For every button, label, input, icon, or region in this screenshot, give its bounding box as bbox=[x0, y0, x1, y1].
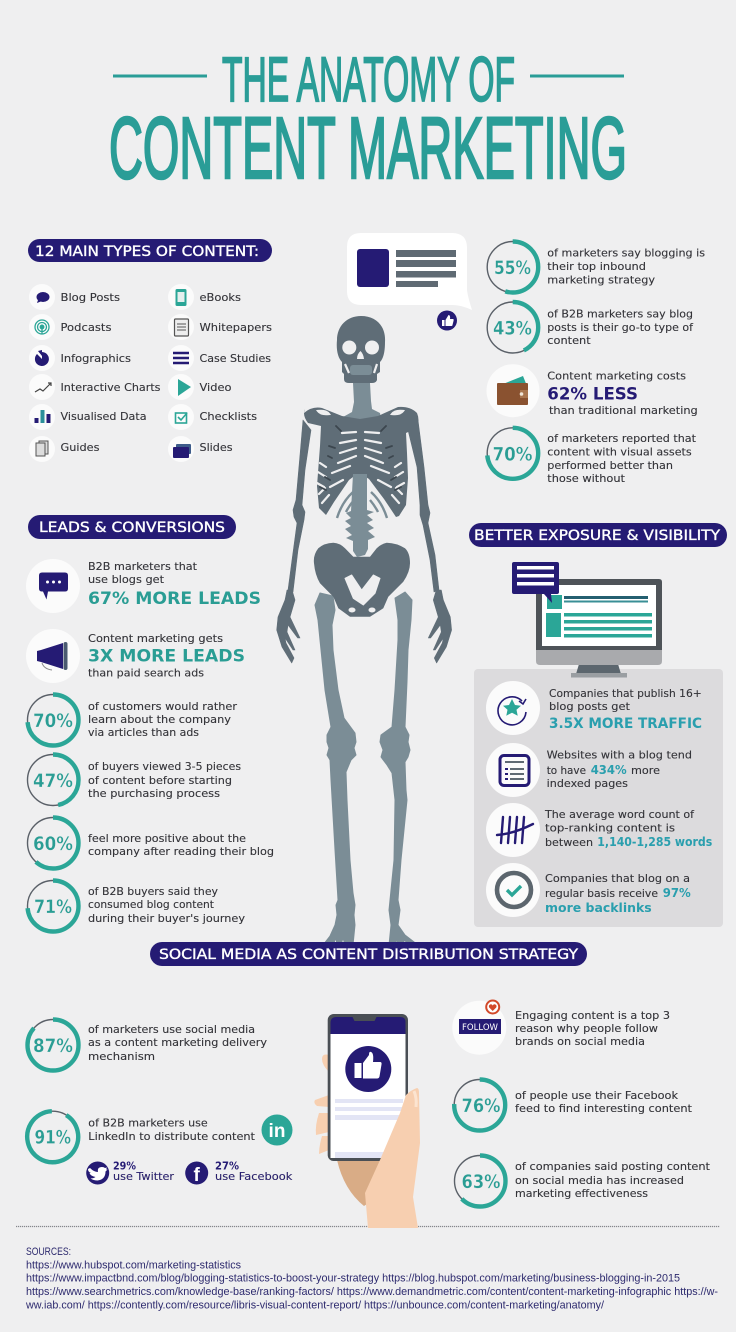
list labels: Infographics bbox=[60, 352, 131, 365]
list labels: Case Studies bbox=[200, 352, 271, 365]
list labels: Video bbox=[200, 381, 232, 394]
item: 3.5x more traffic: 3.5X MORE TRAFFIC bbox=[549, 716, 702, 732]
pelvis bbox=[314, 543, 410, 617]
icon: whitepapers bbox=[174, 319, 188, 336]
gray panel background bbox=[474, 669, 723, 927]
heading: leads and conversions bbox=[28, 515, 236, 539]
stat: 43% bbox=[487, 302, 694, 353]
item: word count: The average word count of bbox=[544, 808, 695, 821]
twitter stat: use Twitter bbox=[113, 1170, 174, 1183]
item: 434% more indexed pages: more bbox=[631, 764, 660, 777]
icon circles bbox=[29, 284, 194, 462]
item: word count: 1,140-1,285 words bbox=[597, 835, 712, 849]
stat: 71% buyers journey: consumed blog content bbox=[88, 898, 215, 911]
stat: 70% customers bbox=[28, 694, 237, 746]
stat: 91% linkedin: 91% bbox=[34, 1127, 71, 1149]
twitter stat: 29% bbox=[113, 1160, 136, 1172]
item: 434% more indexed pages: Websites with a blog tend bbox=[547, 748, 692, 762]
stat: 87% social media: mechanism bbox=[88, 1050, 155, 1063]
spine bbox=[345, 474, 375, 557]
stat: 87% social media: 87% bbox=[33, 1035, 73, 1057]
stat: 71% buyers journey: during their buyer's journey bbox=[88, 912, 246, 925]
ribs bbox=[317, 411, 404, 503]
stat: 76% facebook: of people use their Facebook bbox=[515, 1089, 679, 1102]
item: 3.5x more traffic: blog posts get bbox=[549, 700, 631, 713]
stat: 43%: 43% bbox=[493, 318, 532, 340]
stat: 55%: their top inbound bbox=[547, 260, 646, 273]
stat: 71% buyers journey bbox=[28, 880, 246, 932]
stat: 60% positive bbox=[28, 818, 274, 868]
icon: ebooks bbox=[176, 289, 186, 306]
stat: 62% less with wallet icon: 62% LESS bbox=[547, 384, 638, 404]
icon: visualised data bbox=[34, 410, 50, 423]
list labels: Podcasts bbox=[60, 321, 112, 334]
item: 3x more leads: than paid search ads bbox=[88, 666, 204, 680]
icon: video bbox=[178, 379, 191, 396]
item: 67% more leads bbox=[26, 559, 261, 613]
item: 3x more leads bbox=[26, 629, 245, 683]
stat: 91% linkedin: of B2B marketers use bbox=[88, 1116, 208, 1130]
ribcage bbox=[304, 407, 418, 517]
stat: 91% linkedin bbox=[18, 1102, 256, 1172]
item: follow: brands on social media bbox=[515, 1035, 645, 1048]
item: 3x more leads: 3X MORE LEADS bbox=[88, 646, 245, 666]
panel: leads and conversions bbox=[26, 515, 274, 932]
stat: 70% customers: 70% bbox=[33, 710, 73, 732]
speech bubble bbox=[347, 233, 472, 310]
list labels: eBooks bbox=[200, 291, 241, 304]
list labels: Whitepapers bbox=[200, 321, 272, 334]
stat: 70% customers: of customers would rather bbox=[88, 700, 237, 713]
item: 434% more indexed pages bbox=[486, 743, 692, 797]
list labels: Interactive Charts bbox=[60, 381, 161, 394]
sources: https://www.searchmetrics.com/knowledge-base/ranking-factors/ https://www.demandmetric.com/content/content-marketing-infographic https://w- bbox=[26, 1286, 718, 1298]
stat: 71% buyers journey: of B2B buyers said they bbox=[88, 885, 218, 898]
stat: 43%: content bbox=[547, 334, 591, 347]
item: 434% more indexed pages: indexed pages bbox=[547, 777, 628, 790]
stat: 76% facebook bbox=[454, 1080, 693, 1130]
stat: 87% social media bbox=[28, 1020, 267, 1070]
list labels: Blog Posts bbox=[60, 291, 120, 304]
icon: monitor bbox=[512, 562, 662, 678]
list labels: Checklists bbox=[200, 410, 257, 423]
stat: 63% companies: of companies said posting content bbox=[515, 1160, 711, 1173]
panel: social left bbox=[18, 1020, 293, 1186]
item: 97% more backlinks: more backlinks bbox=[545, 901, 652, 915]
icon: blog posts bbox=[36, 292, 50, 303]
stat: 70% visual assets: performed better than bbox=[547, 459, 673, 472]
stat: 71% buyers journey: 71% bbox=[34, 896, 72, 918]
item: word count: between bbox=[545, 836, 593, 849]
icon: podcasts bbox=[35, 320, 49, 334]
facebook stat bbox=[185, 1160, 293, 1186]
icon: slides bbox=[173, 444, 191, 458]
stat: 55%: 55% bbox=[494, 257, 531, 279]
icon: checklists bbox=[176, 413, 187, 423]
item: follow: FOLLOW bbox=[462, 1023, 498, 1033]
item: 3.5x more traffic: Companies that publish 16+ bbox=[549, 687, 702, 700]
neck and collar bbox=[343, 383, 381, 423]
heading: social media as content distribution strategy bbox=[150, 942, 587, 966]
item: 97% more backlinks: regular basis receive bbox=[545, 887, 658, 900]
stat: 60% positive: company after reading their blog bbox=[88, 845, 274, 858]
skull bbox=[337, 316, 385, 383]
heading: 12 main types: 12 MAIN TYPES OF CONTENT: bbox=[35, 244, 259, 260]
item: 434% more indexed pages: to have bbox=[547, 764, 586, 777]
sources: https://www.impactbnd.com/blog/blogging-statistics-to-boost-your-strategy https://blog.hubspot.com/marketing/business-blogging-in-2015 bbox=[26, 1272, 680, 1284]
panel: better exposure items bbox=[486, 681, 712, 917]
panel: blogging statistics bbox=[486, 242, 705, 485]
stat: 76% facebook: 76% bbox=[462, 1095, 500, 1117]
item: 67% more leads: B2B marketers that bbox=[88, 560, 198, 573]
list labels bbox=[60, 291, 272, 454]
stat: 87% social media: as a content marketing delivery bbox=[88, 1036, 267, 1049]
icon: case studies bbox=[173, 353, 189, 363]
item: word count: top-ranking content is bbox=[545, 822, 675, 834]
item: follow: reason why people follow bbox=[515, 1022, 658, 1035]
stat: 47% buyers bbox=[28, 754, 241, 806]
stat: 47% buyers: of content before starting bbox=[88, 774, 232, 787]
item: 67% more leads: use blogs get bbox=[88, 573, 165, 586]
stat: 62% less with wallet icon bbox=[486, 364, 698, 417]
sources bbox=[25, 1246, 718, 1312]
icon: guides bbox=[36, 441, 48, 456]
stat: 91% linkedin: LinkedIn to distribute content bbox=[88, 1130, 256, 1143]
stat: 76% facebook: feed to find interesting content bbox=[515, 1102, 693, 1115]
heading: leads and conversions: LEADS & CONVERSIONS bbox=[39, 520, 225, 536]
panel: 12 main types of content bbox=[28, 239, 272, 462]
stat: 60% positive: feel more positive about the bbox=[88, 832, 246, 845]
sources: SOURCES: bbox=[26, 1246, 71, 1258]
item: 434% more indexed pages: 434% bbox=[591, 763, 627, 777]
stat: 70% visual assets: of marketers reported that bbox=[547, 432, 697, 445]
item: 67% more leads: 67% MORE LEADS bbox=[88, 589, 261, 609]
stat: 63% companies bbox=[454, 1156, 711, 1206]
stat: 47% buyers: of buyers viewed 3-5 pieces bbox=[88, 760, 241, 773]
list labels: Slides bbox=[200, 441, 233, 454]
stat: 70% visual assets: 70% bbox=[492, 443, 532, 465]
facebook stat: use Facebook bbox=[215, 1170, 293, 1183]
twitter stat bbox=[86, 1160, 174, 1184]
item: 97% more backlinks bbox=[486, 863, 691, 917]
sources: https://www.hubspot.com/marketing-statistics bbox=[26, 1260, 241, 1272]
stat: 62% less with wallet icon: Content marketing costs bbox=[547, 370, 686, 382]
stat: 43%: posts is their go-to type of bbox=[547, 321, 694, 334]
stat: 43%: of B2B marketers say blog bbox=[547, 308, 693, 320]
stat: 62% less with wallet icon: than traditional marketing bbox=[549, 404, 698, 417]
skeleton bbox=[277, 316, 452, 945]
item: 3.5x more traffic bbox=[486, 681, 702, 735]
illustration: hand holding phone bbox=[314, 1014, 420, 1228]
list labels: Visualised Data bbox=[60, 410, 146, 423]
panel: social right bbox=[452, 1000, 711, 1206]
stat: 70% visual assets bbox=[487, 428, 697, 485]
item: 3x more leads: Content marketing gets bbox=[88, 632, 223, 645]
heading: better exposure and visibility bbox=[469, 523, 727, 547]
heading: 12 main types bbox=[28, 239, 272, 262]
arms bbox=[277, 420, 452, 663]
sources: ww.iab.com/ https://contently.com/resource/libris-visual-content-report/ https://unbounce.com/content-marketing/anatomy/ bbox=[25, 1300, 605, 1312]
stat: 63% companies: marketing effectiveness bbox=[515, 1187, 648, 1200]
icon: linkedin: in bbox=[269, 1121, 285, 1142]
stat: 87% social media: of marketers use social media bbox=[88, 1023, 255, 1036]
heading: better exposure and visibility: BETTER EXPOSURE & VISIBILITY bbox=[474, 528, 720, 544]
icon: infographics bbox=[35, 350, 49, 366]
item: follow bbox=[452, 1000, 670, 1055]
icon: linkedin bbox=[262, 1114, 292, 1146]
stat: 70% customers: via articles than ads bbox=[88, 726, 199, 739]
item: 97% more backlinks: Companies that blog on a bbox=[545, 872, 690, 885]
facebook stat: f bbox=[194, 1165, 201, 1186]
stat: 63% companies: on social media has increased bbox=[515, 1174, 684, 1187]
stat: 55%: of marketers say blogging is bbox=[547, 246, 705, 260]
heading: social media as content distribution strategy: SOCIAL MEDIA AS CONTENT DISTRIBUTION STRATEGY bbox=[159, 947, 578, 963]
title bbox=[109, 45, 627, 197]
stat: 70% visual assets: content with visual assets bbox=[547, 446, 692, 458]
stat: 55%: marketing strategy bbox=[547, 274, 655, 286]
legs bbox=[315, 592, 418, 945]
facebook stat: 27% bbox=[215, 1160, 239, 1172]
stat: 47% buyers: the purchasing process bbox=[88, 787, 220, 800]
item: word count bbox=[486, 803, 712, 857]
icon: thumbs up bbox=[437, 310, 457, 330]
icon: interactive charts bbox=[35, 383, 51, 392]
stat: 60% positive: 60% bbox=[33, 833, 73, 855]
list labels: Guides bbox=[60, 441, 100, 454]
stat: 63% companies: 63% bbox=[462, 1171, 500, 1193]
item: follow: Engaging content is a top 3 bbox=[515, 1009, 670, 1022]
stat: 70% visual assets: those without bbox=[547, 472, 626, 485]
stat: 47% buyers: 47% bbox=[33, 770, 73, 792]
stat: 55% bbox=[487, 242, 705, 292]
stat: 70% customers: learn about the company bbox=[88, 713, 232, 726]
item: 97% more backlinks: 97% bbox=[663, 886, 691, 900]
